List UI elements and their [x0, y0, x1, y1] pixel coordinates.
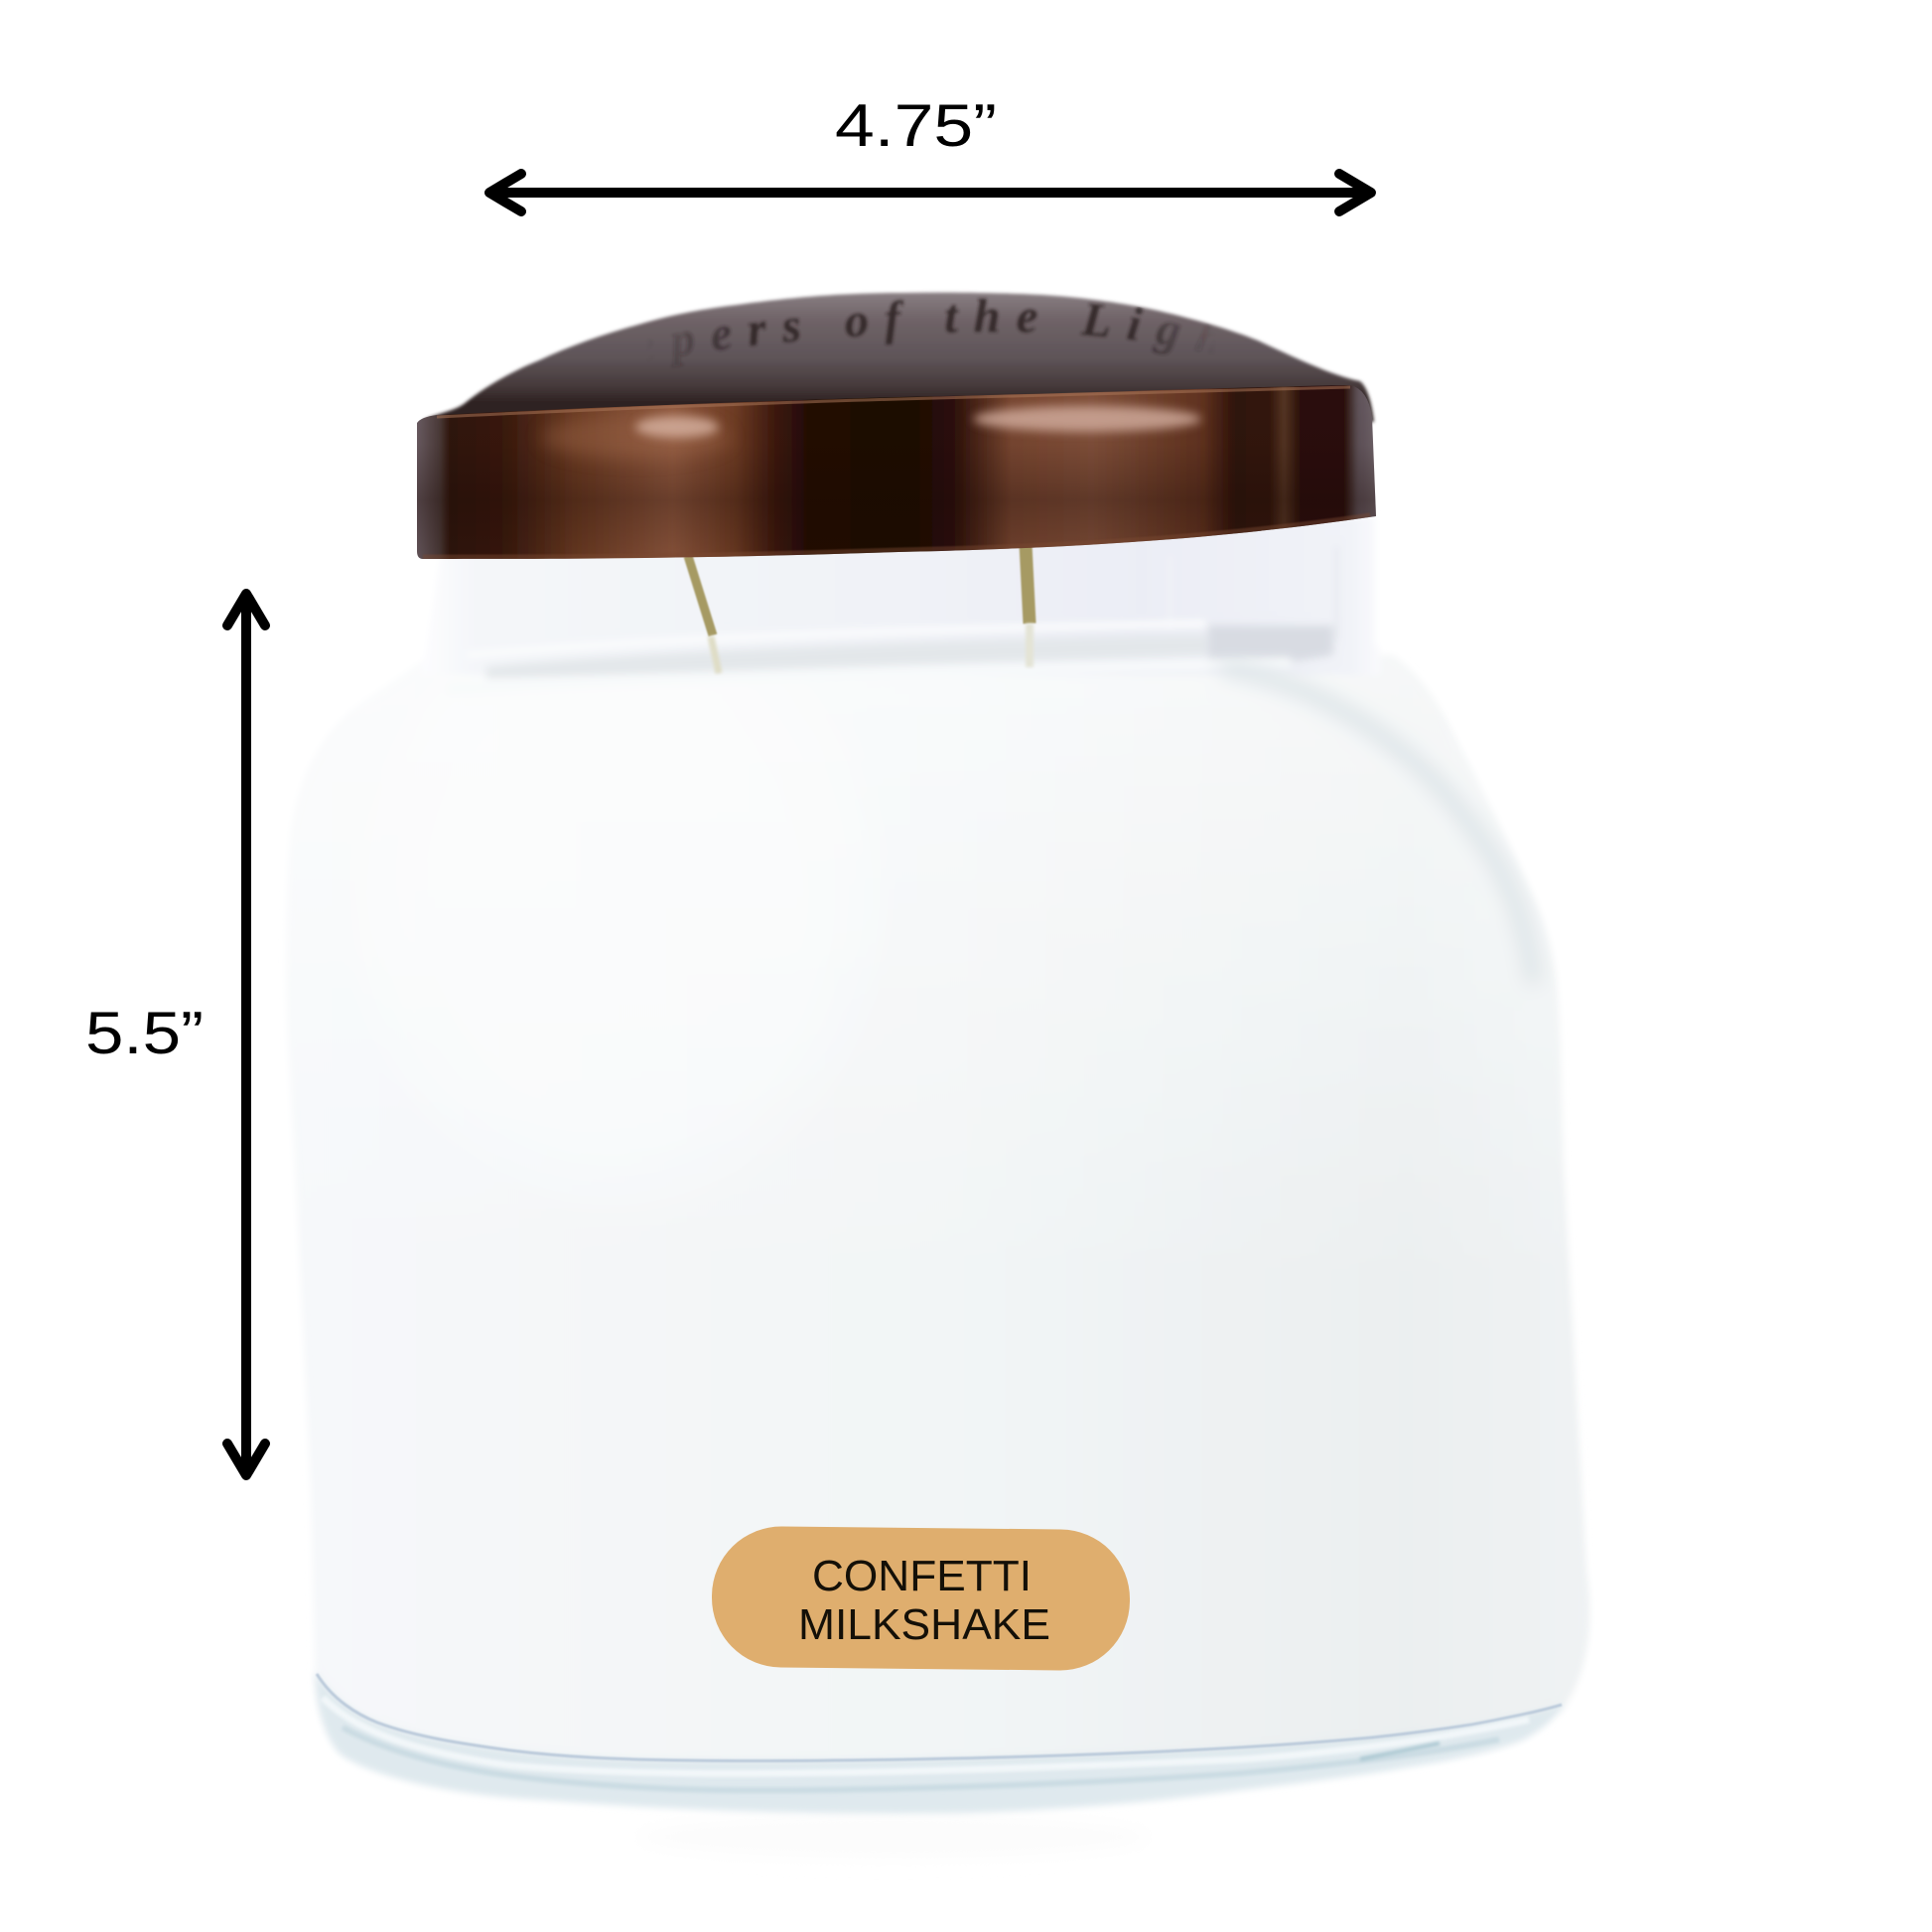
jar body and glass — [268, 516, 1608, 1827]
lid — [417, 290, 1376, 559]
wick left lower — [711, 636, 719, 673]
rim highlight left core — [635, 416, 719, 438]
rim highlight right — [973, 406, 1201, 432]
wick left — [688, 556, 713, 635]
rim vertical shading — [417, 451, 1376, 559]
flavor label — [711, 1526, 1131, 1671]
lid dome — [422, 293, 1374, 422]
lid rim — [412, 377, 1385, 566]
rim top edge — [437, 387, 1350, 417]
label text: CONFETTI — [812, 1552, 1032, 1600]
height label: 5.5” — [85, 1000, 204, 1066]
height arrow — [227, 594, 265, 1475]
rim highlight left — [541, 415, 730, 459]
label text — [798, 1552, 1050, 1649]
rim bottom edge — [423, 515, 1370, 557]
upper wax lightening — [1160, 657, 1467, 798]
wick right lower — [1026, 623, 1034, 667]
wax soft highlight — [357, 596, 874, 1191]
glass neck — [459, 518, 1370, 680]
width label: 4.75” — [835, 92, 997, 159]
label text: MILKSHAKE — [798, 1600, 1050, 1649]
shoulder shading — [1221, 667, 1534, 983]
glass base fill — [314, 1676, 1561, 1815]
jar — [229, 290, 1589, 1815]
label pill — [711, 1526, 1131, 1671]
faint reflection under jar — [635, 1815, 1152, 1859]
infographic: candle jar with dimensions — [87, 104, 1589, 1817]
width arrow — [489, 174, 1371, 211]
frosted wax body — [268, 655, 1608, 1827]
glass base lines — [317, 1674, 1562, 1790]
lid engraving: Keepers of the Light — [673, 296, 1210, 367]
wick right — [1026, 544, 1030, 623]
